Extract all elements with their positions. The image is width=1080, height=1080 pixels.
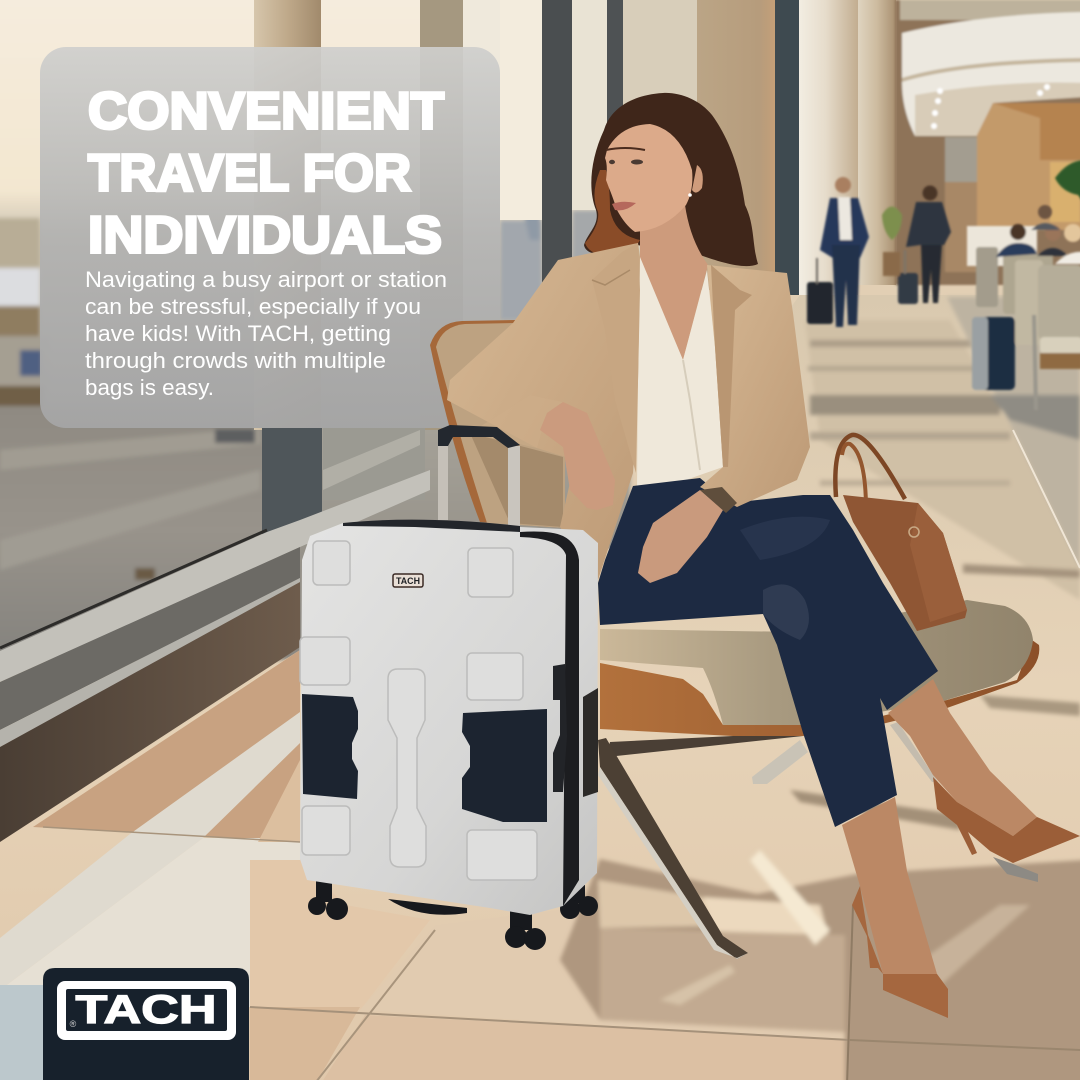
body text: have kids! With TACH, getting (85, 321, 391, 346)
heading (88, 82, 444, 264)
body text (85, 267, 447, 400)
brown handbag (835, 435, 967, 631)
heading: CONVENIENT (88, 82, 444, 140)
blazer left (447, 243, 640, 580)
window sill (0, 470, 430, 842)
window view: sky and apron (0, 0, 630, 660)
chair base and legs (598, 722, 938, 959)
black side clamps (302, 664, 598, 822)
wristwatch (700, 487, 737, 513)
floor tones and reflections (0, 295, 1080, 1080)
shadow under the chair and lower right (560, 850, 1080, 1080)
TACH tag on suitcase (393, 574, 423, 587)
hair (584, 93, 758, 266)
chair back (430, 320, 565, 528)
body text: can be stressful, especially if you (85, 294, 421, 319)
seat shell (600, 640, 1039, 736)
logo: TACH badge: ® (70, 1019, 77, 1029)
window frame columns (254, 0, 623, 534)
right hand (638, 490, 723, 583)
embossed panels (300, 541, 537, 880)
TACH tag on suitcase: TACH (396, 576, 420, 586)
traveller with navy suit (807, 177, 869, 327)
body text: Navigating a busy airport or station (85, 267, 447, 292)
logo: TACH badge (43, 968, 249, 1080)
shell (300, 523, 598, 915)
zipper band (520, 532, 579, 906)
top handle (343, 520, 520, 532)
trousers (598, 478, 938, 827)
shoe: standing leg (852, 886, 948, 1018)
traveller walking away (898, 186, 951, 304)
body text: bags is easy. (85, 375, 214, 400)
heading: TRAVEL FOR (88, 144, 411, 202)
panel: frosted text card (40, 47, 500, 428)
back wall and upper level (895, 0, 1080, 285)
neck (640, 205, 708, 360)
suitcase (300, 425, 598, 950)
lower leg: standing (842, 797, 937, 974)
plants (882, 206, 902, 240)
metal foot (993, 857, 1038, 882)
logo: TACH badge: TACH (76, 988, 216, 1032)
background travellers and seating (807, 160, 1080, 410)
telescoping handle (438, 425, 520, 526)
heading: INDIVIDUALS (88, 206, 442, 264)
lounge chair (430, 320, 1039, 959)
facial details (606, 148, 703, 210)
body text: through crowds with multiple (85, 348, 386, 373)
lower leg: crossed (888, 679, 1037, 836)
face (605, 124, 692, 232)
central column (623, 0, 896, 295)
lower floor: left peach and glass reflection (33, 650, 300, 842)
blouse (637, 257, 723, 490)
shoe: crossed leg (933, 777, 1080, 863)
seating area (967, 205, 1080, 410)
woman (447, 93, 1080, 1018)
wheels (308, 880, 598, 950)
blazer right (700, 265, 810, 507)
left hand (540, 402, 615, 510)
seat cushion (600, 600, 1033, 725)
